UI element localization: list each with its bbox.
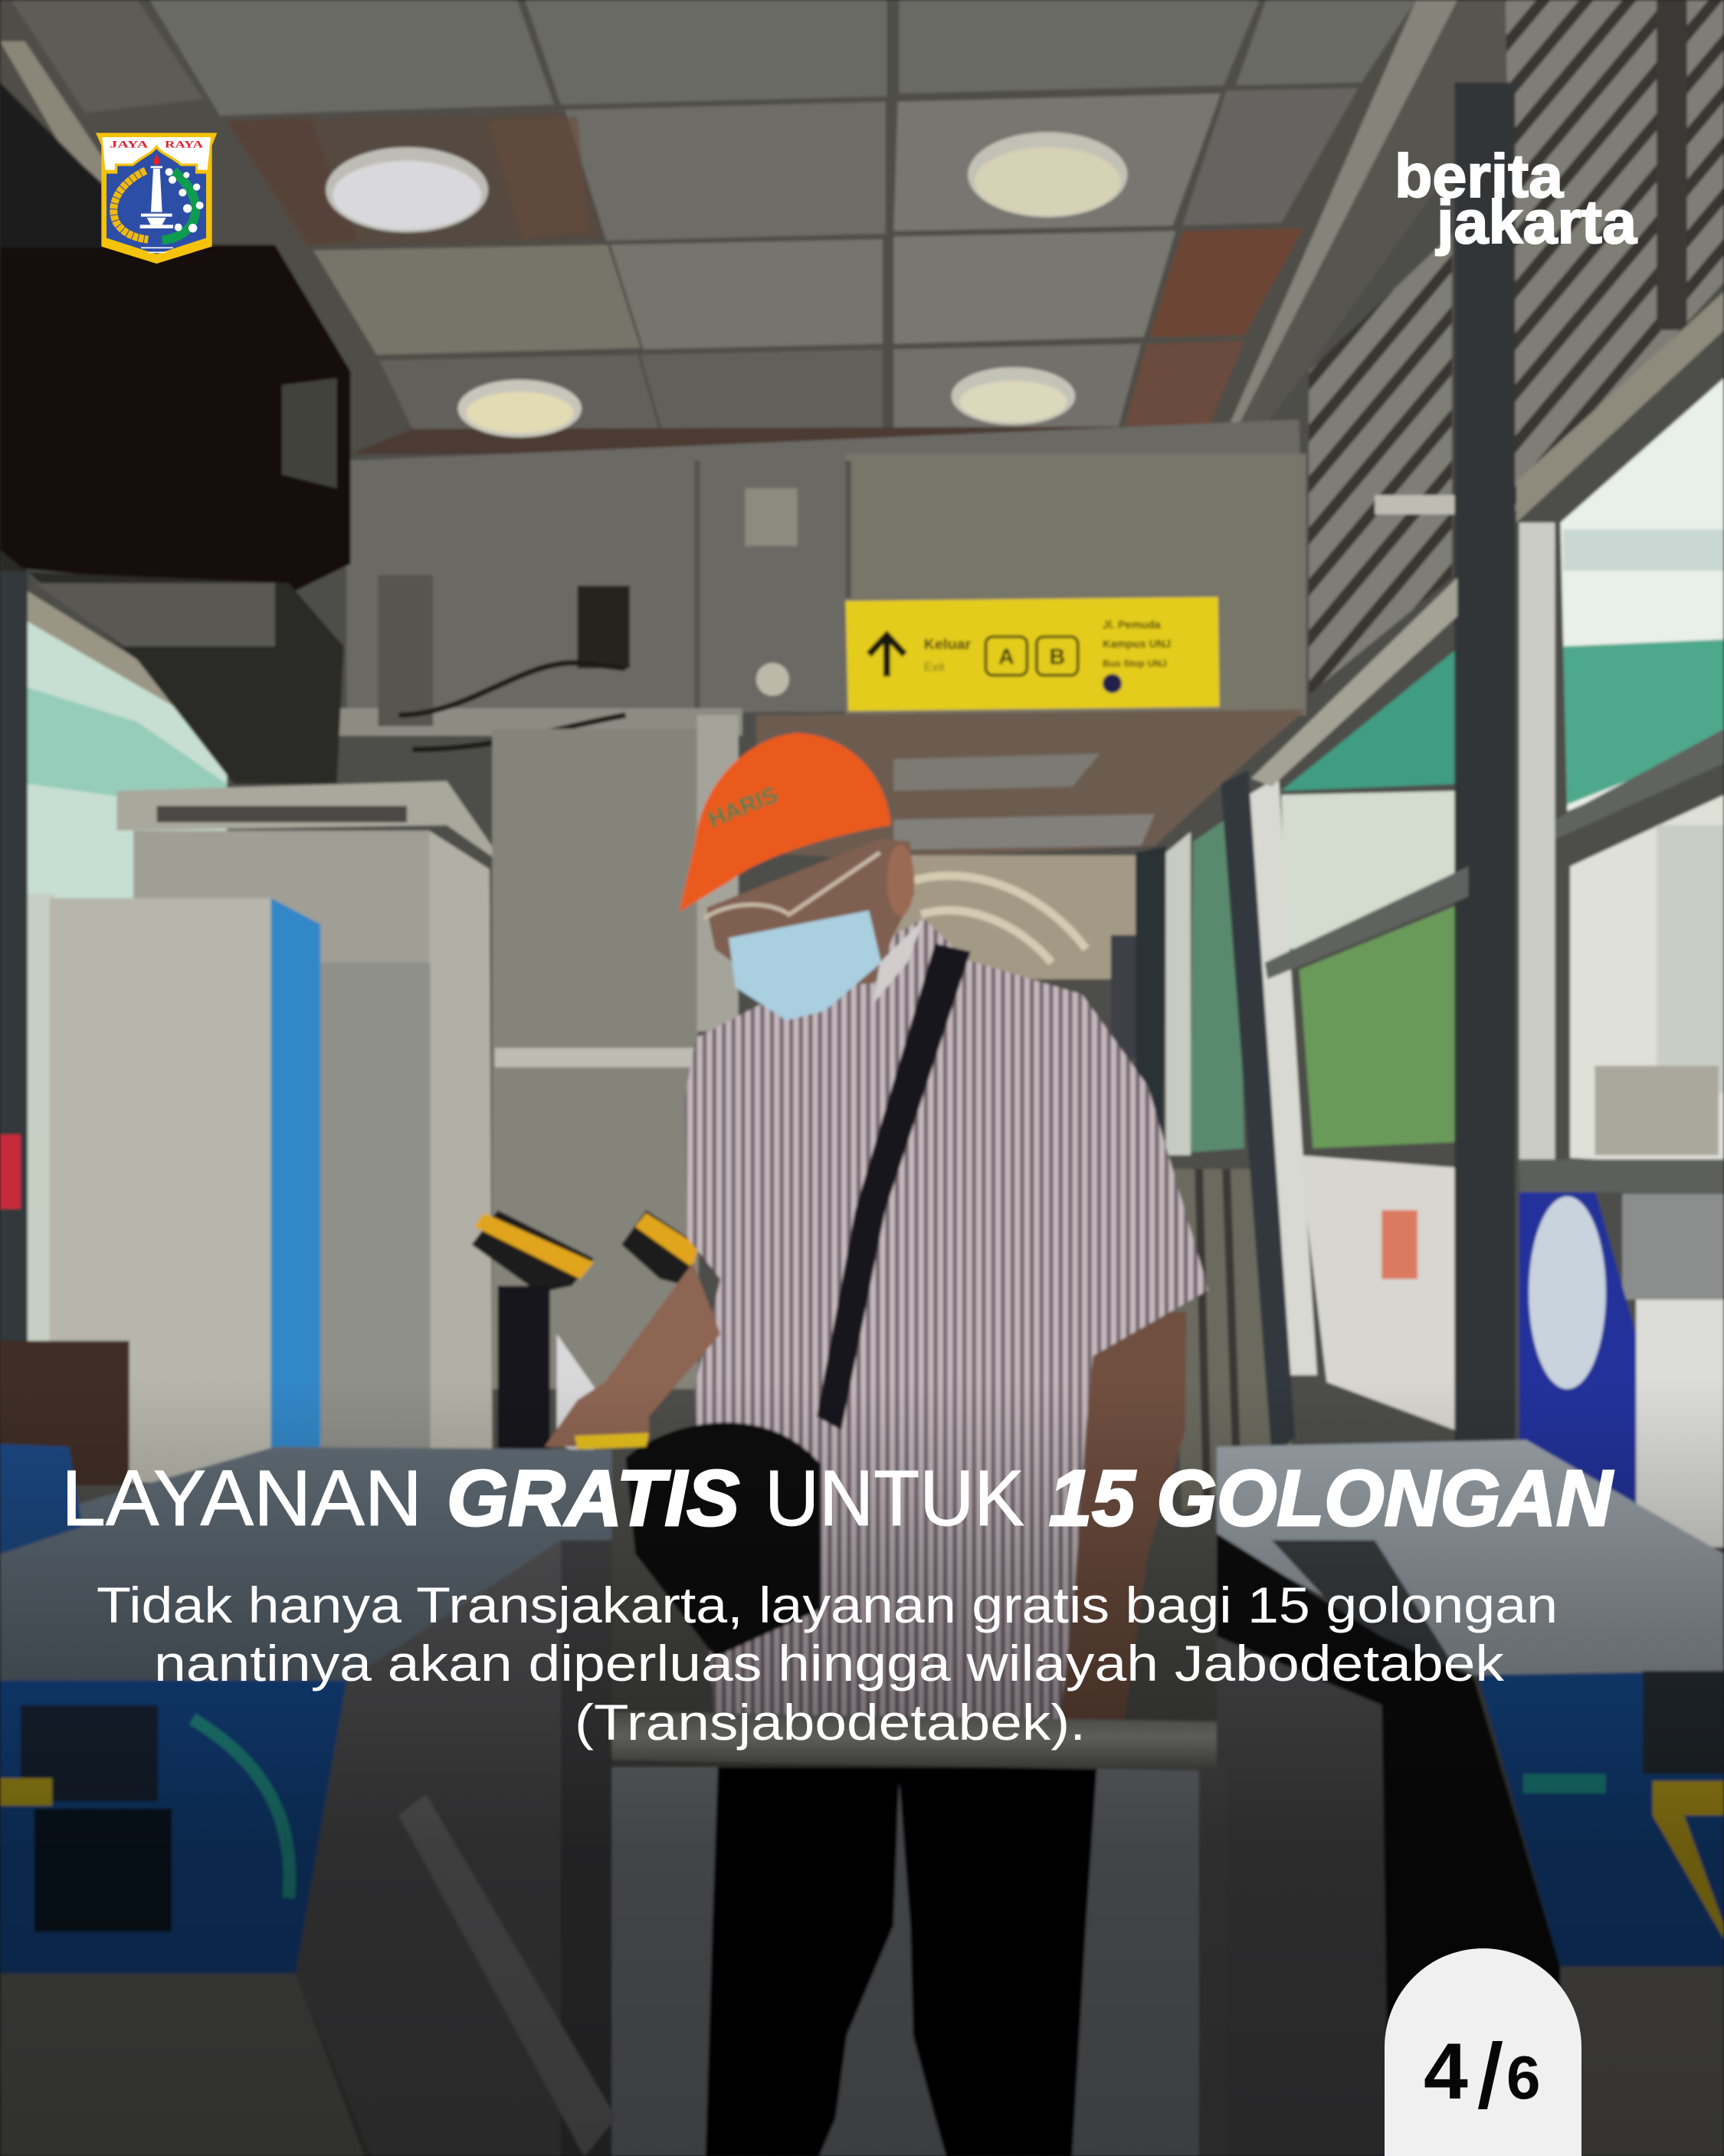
- cabinets: [0, 781, 506, 1485]
- page counter badge: 6: [1506, 2043, 1540, 2112]
- exit sign: Bus Stop UNJ: [1103, 658, 1167, 669]
- man: forearm right: [1059, 1307, 1186, 1719]
- man: face mask: [729, 911, 881, 1020]
- exit sign: [845, 597, 1220, 711]
- left window: [0, 537, 227, 1347]
- ceiling AC box: [0, 83, 351, 784]
- window pillars: [1136, 83, 1724, 1458]
- ceiling: [0, 0, 1457, 454]
- exit sign: Jl. Pemuda: [1103, 619, 1162, 632]
- right windows: [1166, 378, 1724, 1547]
- man: shirt: [685, 919, 1208, 1735]
- emblem motto: JAYA: [110, 138, 149, 149]
- body text: Tidak hanya Transjakarta, layanan gratis bagi 15 golongan: [97, 1577, 1558, 1633]
- berita jakarta logo: jakarta: [1435, 188, 1637, 256]
- exit sign: A: [998, 645, 1014, 670]
- man: face and ear: [706, 839, 924, 1004]
- emblem rice wreath: [113, 171, 148, 240]
- exit sign: Exit: [924, 661, 945, 674]
- title: UNTUK: [765, 1454, 1024, 1542]
- man: crossbody bag: [575, 943, 971, 1657]
- right turnstile: [1199, 1440, 1724, 2156]
- body text: (Transjabodetabek).: [575, 1694, 1086, 1751]
- title: GRATIS: [447, 1454, 739, 1542]
- title: [61, 1454, 1614, 1542]
- body text: nantinya akan diperluas hingga wilayah Jabodetabek: [154, 1635, 1505, 1692]
- page counter badge: [1385, 1948, 1581, 2156]
- man: orange cap: [679, 733, 891, 912]
- man: orange cap: HARIS: [704, 782, 782, 833]
- left turnstile: [0, 1444, 616, 2156]
- side louvres: [1309, 0, 1724, 694]
- emblem motto: RAYA: [165, 138, 204, 149]
- berita jakarta logo: [1395, 142, 1637, 256]
- emblem motto: [110, 138, 204, 149]
- page counter badge: 4: [1424, 2027, 1468, 2116]
- exit sign: Keluar: [924, 636, 971, 653]
- card readers: [471, 1210, 699, 1458]
- body text: [97, 1577, 1558, 1751]
- roof beam: [1217, 0, 1457, 454]
- bottom dark overlay: [0, 1380, 1724, 2156]
- title: LAYANAN: [61, 1454, 422, 1542]
- floor and pants: [611, 1767, 1203, 2156]
- emblem water: [141, 248, 173, 252]
- Jakarta Jaya Raya emblem: [96, 133, 217, 264]
- man: arm and hand: [545, 1262, 720, 1447]
- inner wall and shelf: [492, 715, 739, 1389]
- emblem cotton wreath: [162, 168, 204, 240]
- title: 15 GOLONGAN: [1049, 1454, 1614, 1542]
- corridor behind the man: [756, 710, 1306, 1059]
- exit sign: B: [1049, 645, 1065, 670]
- turnstile rail: [492, 1709, 1221, 1771]
- man: glasses: [704, 852, 880, 919]
- back wall: [330, 419, 1306, 750]
- ceiling lights: [326, 132, 1127, 852]
- exit sign: Kampus UNJ: [1103, 638, 1171, 651]
- emblem monument: [140, 155, 173, 228]
- berita jakarta logo: berita: [1395, 142, 1564, 210]
